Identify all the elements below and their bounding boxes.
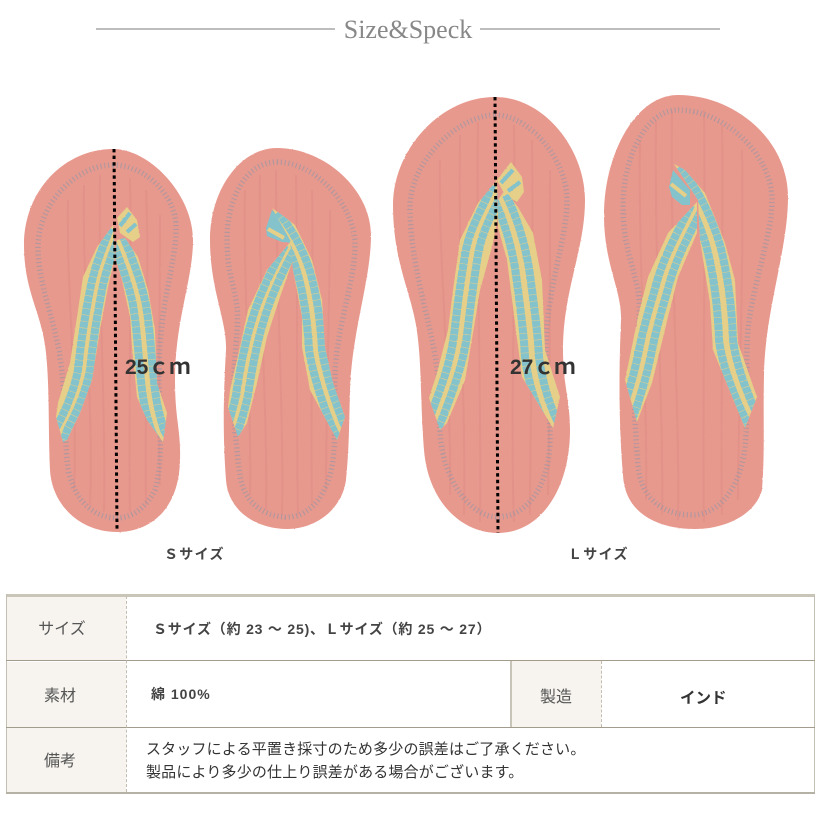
value: notes — [146, 741, 585, 781]
header cell: notes — [6, 728, 126, 793]
heading rule left — [96, 28, 335, 30]
caption: L size: Ｌサイズ — [568, 546, 629, 562]
label: notes: 備考 — [44, 753, 76, 770]
dimension label: 25 cm: 25ｃｍ — [125, 356, 190, 379]
measure line: 27 cm — [495, 97, 498, 533]
table bottom border — [6, 792, 815, 794]
header cell: size — [6, 596, 126, 660]
column line dashed 2 — [601, 661, 602, 727]
value: notes: 製品により多少の仕上り誤差がある場合がございます。 — [146, 764, 523, 781]
column line dashed 1 — [126, 596, 127, 792]
value: material: 綿 100% — [151, 686, 211, 702]
value: made in: インド — [680, 690, 727, 707]
value: size: Ｓサイズ（約 23 ～ 25)、Ｌサイズ（約 25 ～ 27） — [153, 621, 491, 637]
sandal: L left — [393, 97, 585, 533]
row line 1 — [6, 660, 815, 661]
header cell: made in — [512, 661, 601, 727]
label: size: サイズ — [38, 621, 86, 638]
title: Size&Speck — [344, 15, 472, 44]
table right border — [814, 594, 815, 794]
table left border — [6, 594, 7, 794]
caption: S size: Ｓサイズ — [164, 546, 225, 562]
dimension label: 27 cm: 27ｃｍ — [510, 356, 575, 379]
sandal illustrations — [24, 95, 788, 533]
value: notes: スタッフによる平置き採寸のため多少の誤差はご了承ください。 — [146, 741, 585, 758]
row line 2 — [6, 727, 815, 728]
measure line: 25 cm — [114, 149, 117, 530]
sandal: S right — [210, 148, 371, 529]
label: material: 素材 — [44, 688, 76, 705]
table top border — [6, 594, 815, 596]
label: made in: 製造 — [540, 689, 572, 706]
spec table — [6, 594, 815, 794]
sandal: L right — [604, 95, 788, 529]
header cell: material — [6, 662, 126, 727]
heading rule right — [480, 28, 720, 30]
sandal: S left — [24, 149, 193, 532]
column line solid — [510, 661, 512, 727]
